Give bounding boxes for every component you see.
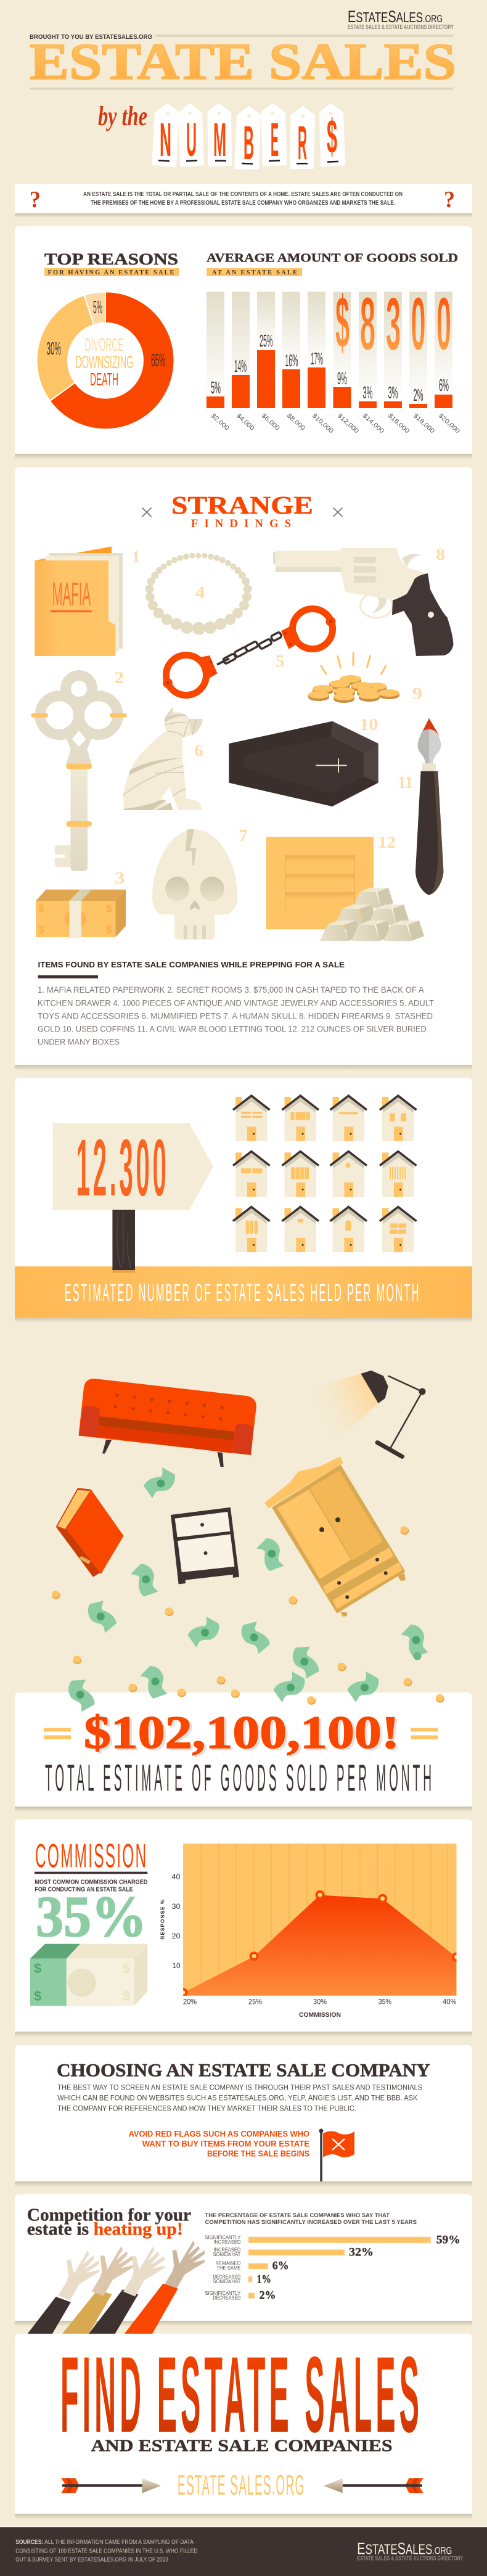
numbers on items: 8 [436,545,445,564]
bar chart: goods sold: 9% [337,369,347,388]
bar chart: goods sold: 17% [311,349,323,368]
panel: strange findings [15,467,472,1070]
area chart: response by commission: RESPONSE % [159,1899,165,1940]
intro text: THE PREMISES OF THE HOME BY A PROFESSIONAL ESTATE SALE COMPANY WHO ORGANIZES AND MARKETS THE SALE. [91,200,395,207]
footer logo: ESTATESALES.ORG [357,2539,452,2558]
header [30,7,456,170]
bar chart: competition: SIGNIFICANTLY [205,2291,241,2296]
heading: average amount [207,252,458,276]
intro text: AN ESTATE SALE IS THE TOTAL OR PARTIAL SALE OF THE CONTENTS OF A HOME. ESTATE SALES ARE OFTEN CONDUCTED ON [83,191,403,198]
bar chart: goods sold: $12,000 [336,412,360,435]
logo: ESTATESALES.ORG [348,7,443,26]
item 3: taped cash: $ [38,924,44,935]
donut chart: DEATH [90,370,118,390]
bar chart: competition [205,2234,460,2302]
bar chart: goods sold: 2% [413,385,423,404]
sources: CONSISTING OF 100 ESTATE SALE COMPANIES IN THE U.S. WHO FILLED [15,2547,198,2554]
heading: strange findings [142,491,343,530]
bar chart: competition: DECREASED [213,2274,241,2279]
description: COMPETITION HAS SIGNIFICANTLY INCREASED OVER THE LAST 5 YEARS [205,2219,417,2226]
numbers on items [114,545,445,887]
description [205,2212,417,2226]
bar chart: goods sold: $2,000 [210,412,231,432]
red flag warning: AVOID RED FLAGS SUCH AS COMPANIES WHO [129,2130,309,2139]
item 3: taped cash: $ [38,903,44,914]
donut chart [37,292,174,429]
big total: $102,100,100! [86,1709,402,1760]
item 9: gold coins [308,653,399,703]
title: ESTATE SALES [30,33,456,91]
big total [44,1707,438,1760]
item 11: blood letting tool [415,718,443,895]
heading: average amount: AT AN ESTATE SALE [212,269,297,276]
bar chart: goods sold: 3% [388,383,398,402]
item 3: taped cash: $ [106,903,112,914]
heading: average amount: AVERAGE AMOUNT OF GOODS SOLD [207,252,458,265]
item 1: mafia folder [35,546,123,656]
numbers on items: 11 [398,773,413,792]
items list [38,985,434,1047]
items heading: ITEMS FOUND BY ESTATE SALE COMPANIES WHILE PREPPING FOR A SALE [38,960,345,969]
sources: OUT A SURVEY SENT BY ESTATESALES.ORG IN JULY OF 2013 [15,2556,168,2564]
arrow: right [324,2478,424,2493]
price tags spelling numbers: $ [327,109,337,163]
price tags spelling numbers: R [298,117,307,170]
bar chart: goods sold: 3% [362,383,372,402]
red flag warning: WANT TO BUY ITEMS FROM YOUR ESTATE [142,2139,309,2149]
sofa [79,1379,256,1467]
icon: red flag [319,2128,354,2181]
numbers on items: 3 [115,869,125,887]
item 12: crate and silver bars [266,837,424,941]
numbers on items: 2 [114,668,125,687]
by the: by the [98,101,147,131]
bar chart: goods sold: 14% [234,356,247,375]
heading: top reasons: FOR HAVING AN ESTATE SALE [48,269,174,276]
bar chart: goods sold: 16% [285,351,298,370]
icon: cash stack: $ [123,1961,130,1976]
area chart: response by commission: 30% [313,1998,327,2006]
lamp [292,1371,425,1456]
items list: GOLD 10. USED COFFINS 11. A CIVIL WAR BLOOD LETTING TOOL 12. 212 OUNCES OF SILVER BURIED [38,1024,427,1033]
items list: UNDER MANY BOXES [38,1038,120,1047]
item 8: revolver [273,548,454,656]
sources: SOURCES: ALL THE INFORMATION CAME FROM A SAMPLING OF DATA [15,2538,194,2546]
bar chart: goods sold: $10,000 [311,412,335,435]
intro text [83,191,403,207]
bar chart: competition: INCREASED [213,2239,241,2245]
panel: 12,300 estate sales [15,1078,472,1323]
items heading [38,960,345,978]
item 7: skull [152,829,237,940]
bar chart: competition: REMAINED [215,2260,241,2266]
bar chart: competition: SOMEWHAT [213,2279,241,2284]
houses grid [233,1096,417,1252]
big average figure: 0 [411,282,425,366]
bar chart: goods sold: $18,000 [412,412,436,435]
body text [57,2084,423,2112]
bar chart: competition: 1% [257,2274,271,2286]
description: THE PERCENTAGE OF ESTATE SALE COMPANIES WHO SAY THAT [205,2212,390,2219]
heading [27,2206,191,2239]
item 6: mummified cat [123,707,203,810]
nightstand [171,1507,239,1584]
area chart: response by commission: 40% [443,1998,457,2006]
arrow: left [61,2478,161,2493]
red flag warning [129,2130,309,2159]
numbers on items: 5 [276,652,285,670]
body text: WHICH CAN BE FOUND ON WEBSITES SUCH AS ESTATESALES.ORG, YELP, ANGIE'S LIST, AND THE BBB. ASK [57,2094,418,2102]
body text: THE BEST WAY TO SCREEN AN ESTATE SALE COMPANY IS THROUGH THEIR PAST SALES AND TESTIMONIALS [57,2084,423,2091]
heading: estate is heating up! [27,2220,183,2239]
price tags spelling numbers: E [271,113,279,166]
heading: commission: MOST COMMON COMMISSION CHARGED [35,1879,147,1886]
area chart: response by commission: COMMISSION [299,2011,341,2019]
panel: commission: COMMISSION [35,1836,147,1874]
heading: strange findings: FINDINGS [191,518,291,530]
big average figure [335,281,451,366]
heading: top reasons [44,250,179,276]
item 5: handcuffs [163,609,335,695]
area chart: response by commission: 20% [183,1998,197,2006]
bar chart: competition: SIGNIFICANTLY [205,2234,241,2240]
panel: intro definition [15,184,472,218]
item 10: coffin [229,721,379,806]
numbers on items: 9 [412,684,422,703]
items list: 1. MAFIA RELATED PAPERWORK 2. SECRET ROOMS 3. $75,000 IN CASH TAPED TO THE BACK OF A [38,985,424,995]
bar chart: goods sold: $16,000 [387,412,411,435]
credit line: BROUGHT TO YOU BY ESTATESALES.ORG [30,33,152,41]
heading: CHOOSING AN ESTATE SALE COMPANY [57,2061,430,2081]
big average figure: 3 [386,282,401,366]
orange caption band [15,1266,472,1317]
price tags spelling numbers: M [213,113,226,166]
bar chart: goods sold: $8,000 [285,412,306,432]
heading: top reasons: TOP REASONS [44,250,178,268]
bar chart: competition: SOMEWHAT [213,2252,241,2257]
item 3: taped cash [36,890,126,938]
area chart: response by commission: 10 [173,1961,181,1970]
bar chart: competition: DECREASED [213,2295,241,2300]
panel: choosing a company [15,2045,472,2187]
illustration: raised hands [27,2241,205,2334]
icon: cash stack [30,1944,147,2006]
numbers on items: 10 [359,715,378,734]
body text: THE COMPANY FOR REFERENCES AND HOW THEY MARKET THEIR SALES TO THE PUBLIC. [57,2105,356,2112]
numbers on items: 4 [195,583,205,602]
donut chart: 30% [47,339,61,359]
area chart: response by commission: 30 [171,1902,181,1911]
wardrobe [264,1456,406,1617]
numbers on items: 7 [239,826,248,845]
numbers on items: 1 [132,548,140,566]
numbers on items: 6 [194,741,203,760]
item 1: mafia folder: MAFIA [52,576,91,612]
bar chart: goods sold: $4,000 [235,412,256,432]
icon: cash stack: $ [34,1988,41,2004]
bar chart: competition: INCREASED [213,2247,241,2252]
book [56,1488,123,1577]
panel: commission [15,1819,472,2037]
heading: commission: FOR CONDUCTING AN ESTATE SALE [35,1886,133,1893]
signpost [53,1122,213,1273]
panel: reasons and goods sold [15,226,472,459]
bar chart: goods sold [207,281,461,435]
donut chart: DOWNSIZING [75,353,133,372]
panel: competition heating up [15,2194,472,2334]
bar chart: competition: 2% [260,2290,276,2302]
price tags spelling numbers [152,104,345,170]
icon: cash stack: $ [34,1961,41,1976]
red flag warning: BEFORE THE SALE BEGINS [207,2149,309,2159]
falling money and coins [52,1467,444,1715]
heading: strange findings: STRANGE [171,491,313,519]
heading: commission [35,1836,147,1893]
donut chart: 5% [93,298,102,318]
item 2: skeleton key [31,670,127,871]
donut chart: DIVORCE [85,335,123,355]
area chart: response by commission: 40 [171,1873,181,1881]
bar chart: goods sold: $6,000 [260,412,281,432]
sources [15,2538,198,2564]
area chart: response by commission: 35% [379,1998,391,2006]
falling furniture illustration [56,1371,425,1617]
numbers on items: 12 [378,833,396,851]
panel: find estate sales call to action: ESTATE SALES.ORG [178,2469,305,2501]
heading: Competition for your [27,2206,191,2225]
panel: total estimate [15,1692,472,1812]
item 4: pearl necklace [145,553,252,635]
area chart: response by commission: 25% [248,1998,262,2006]
bar chart: competition: THE SAME [216,2265,240,2271]
subheading: AND ESTATE SALE COMPANIES [91,2437,393,2455]
big average figure: $ [335,281,350,364]
panel: find estate sales call to action [15,2334,472,2519]
big average figure: 8 [360,282,375,366]
price tags spelling numbers: N [160,113,171,166]
items list: KITCHEN DRAWER 4. 1000 PIECES OF ANTIQUE AND VINTAGE JEWELRY AND ACCESSORIES 5. ADULT [38,998,434,1007]
donut chart: 65% [151,351,165,371]
big total: $102,100,100! [84,1707,399,1758]
bar chart: goods sold: 25% [260,331,272,350]
icon: question mark left: ? [30,187,41,213]
bar chart: goods sold: 6% [439,375,449,395]
bar chart: competition: 59% [436,2234,460,2247]
icon: cash stack: $ [123,1988,130,2004]
panel: 12,300 estate sales: 12.300 [76,1122,169,1213]
bar chart: goods sold: 0 [436,282,451,366]
area chart: response by commission: 20 [171,1932,181,1940]
item 3: taped cash: $ [106,924,112,935]
price tags spelling numbers: U [186,113,197,166]
area chart: response by commission [159,1844,460,2019]
bar chart: goods sold: 5% [211,378,221,397]
bar chart: goods sold: $20,000 [437,412,461,435]
bar chart: competition: 32% [349,2246,374,2258]
bar chart: competition: 6% [272,2260,289,2273]
bar chart: goods sold: $14,000 [361,412,385,435]
stat: 35 percent: 35% [36,1885,147,1949]
icon: question mark right: ? [444,187,455,213]
items list: TOYS AND ACCESSORIES 6. MUMMIFIED PETS 7. A HUMAN SKULL 8. HIDDEN FIREARMS 9. STASHED [38,1012,433,1021]
footer [0,2526,487,2576]
price tags spelling numbers: B [243,117,254,170]
